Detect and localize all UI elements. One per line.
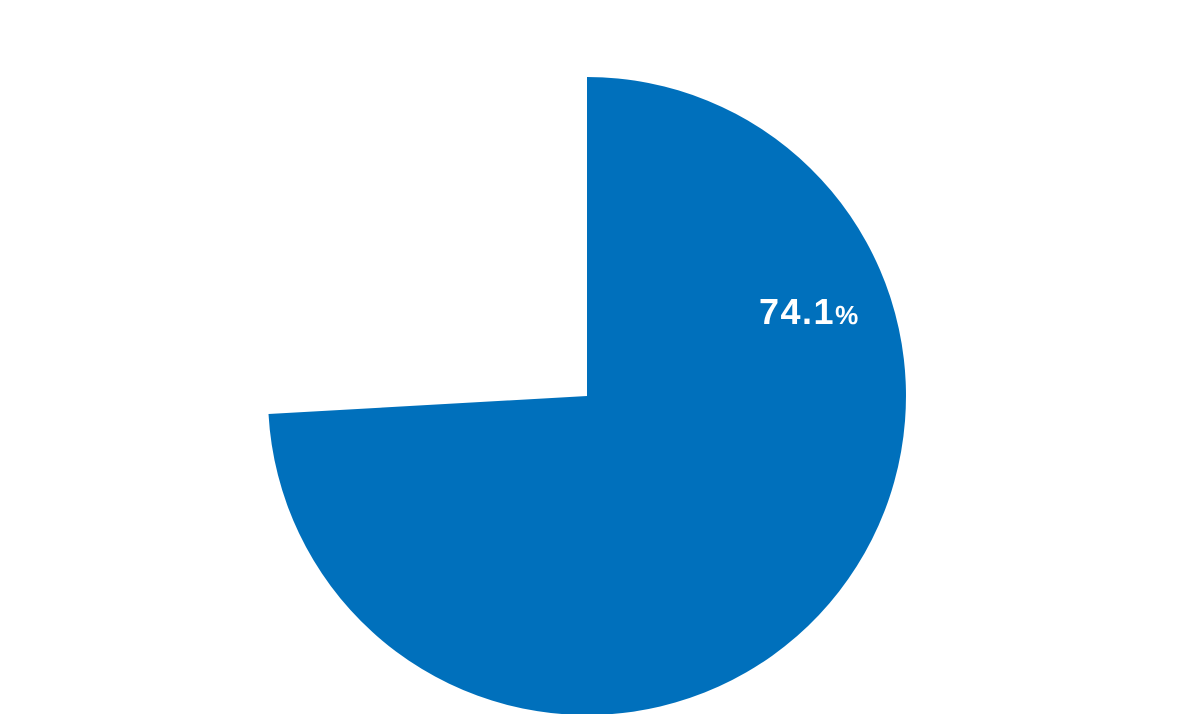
label: 74.1%: 74.1% <box>759 291 860 332</box>
